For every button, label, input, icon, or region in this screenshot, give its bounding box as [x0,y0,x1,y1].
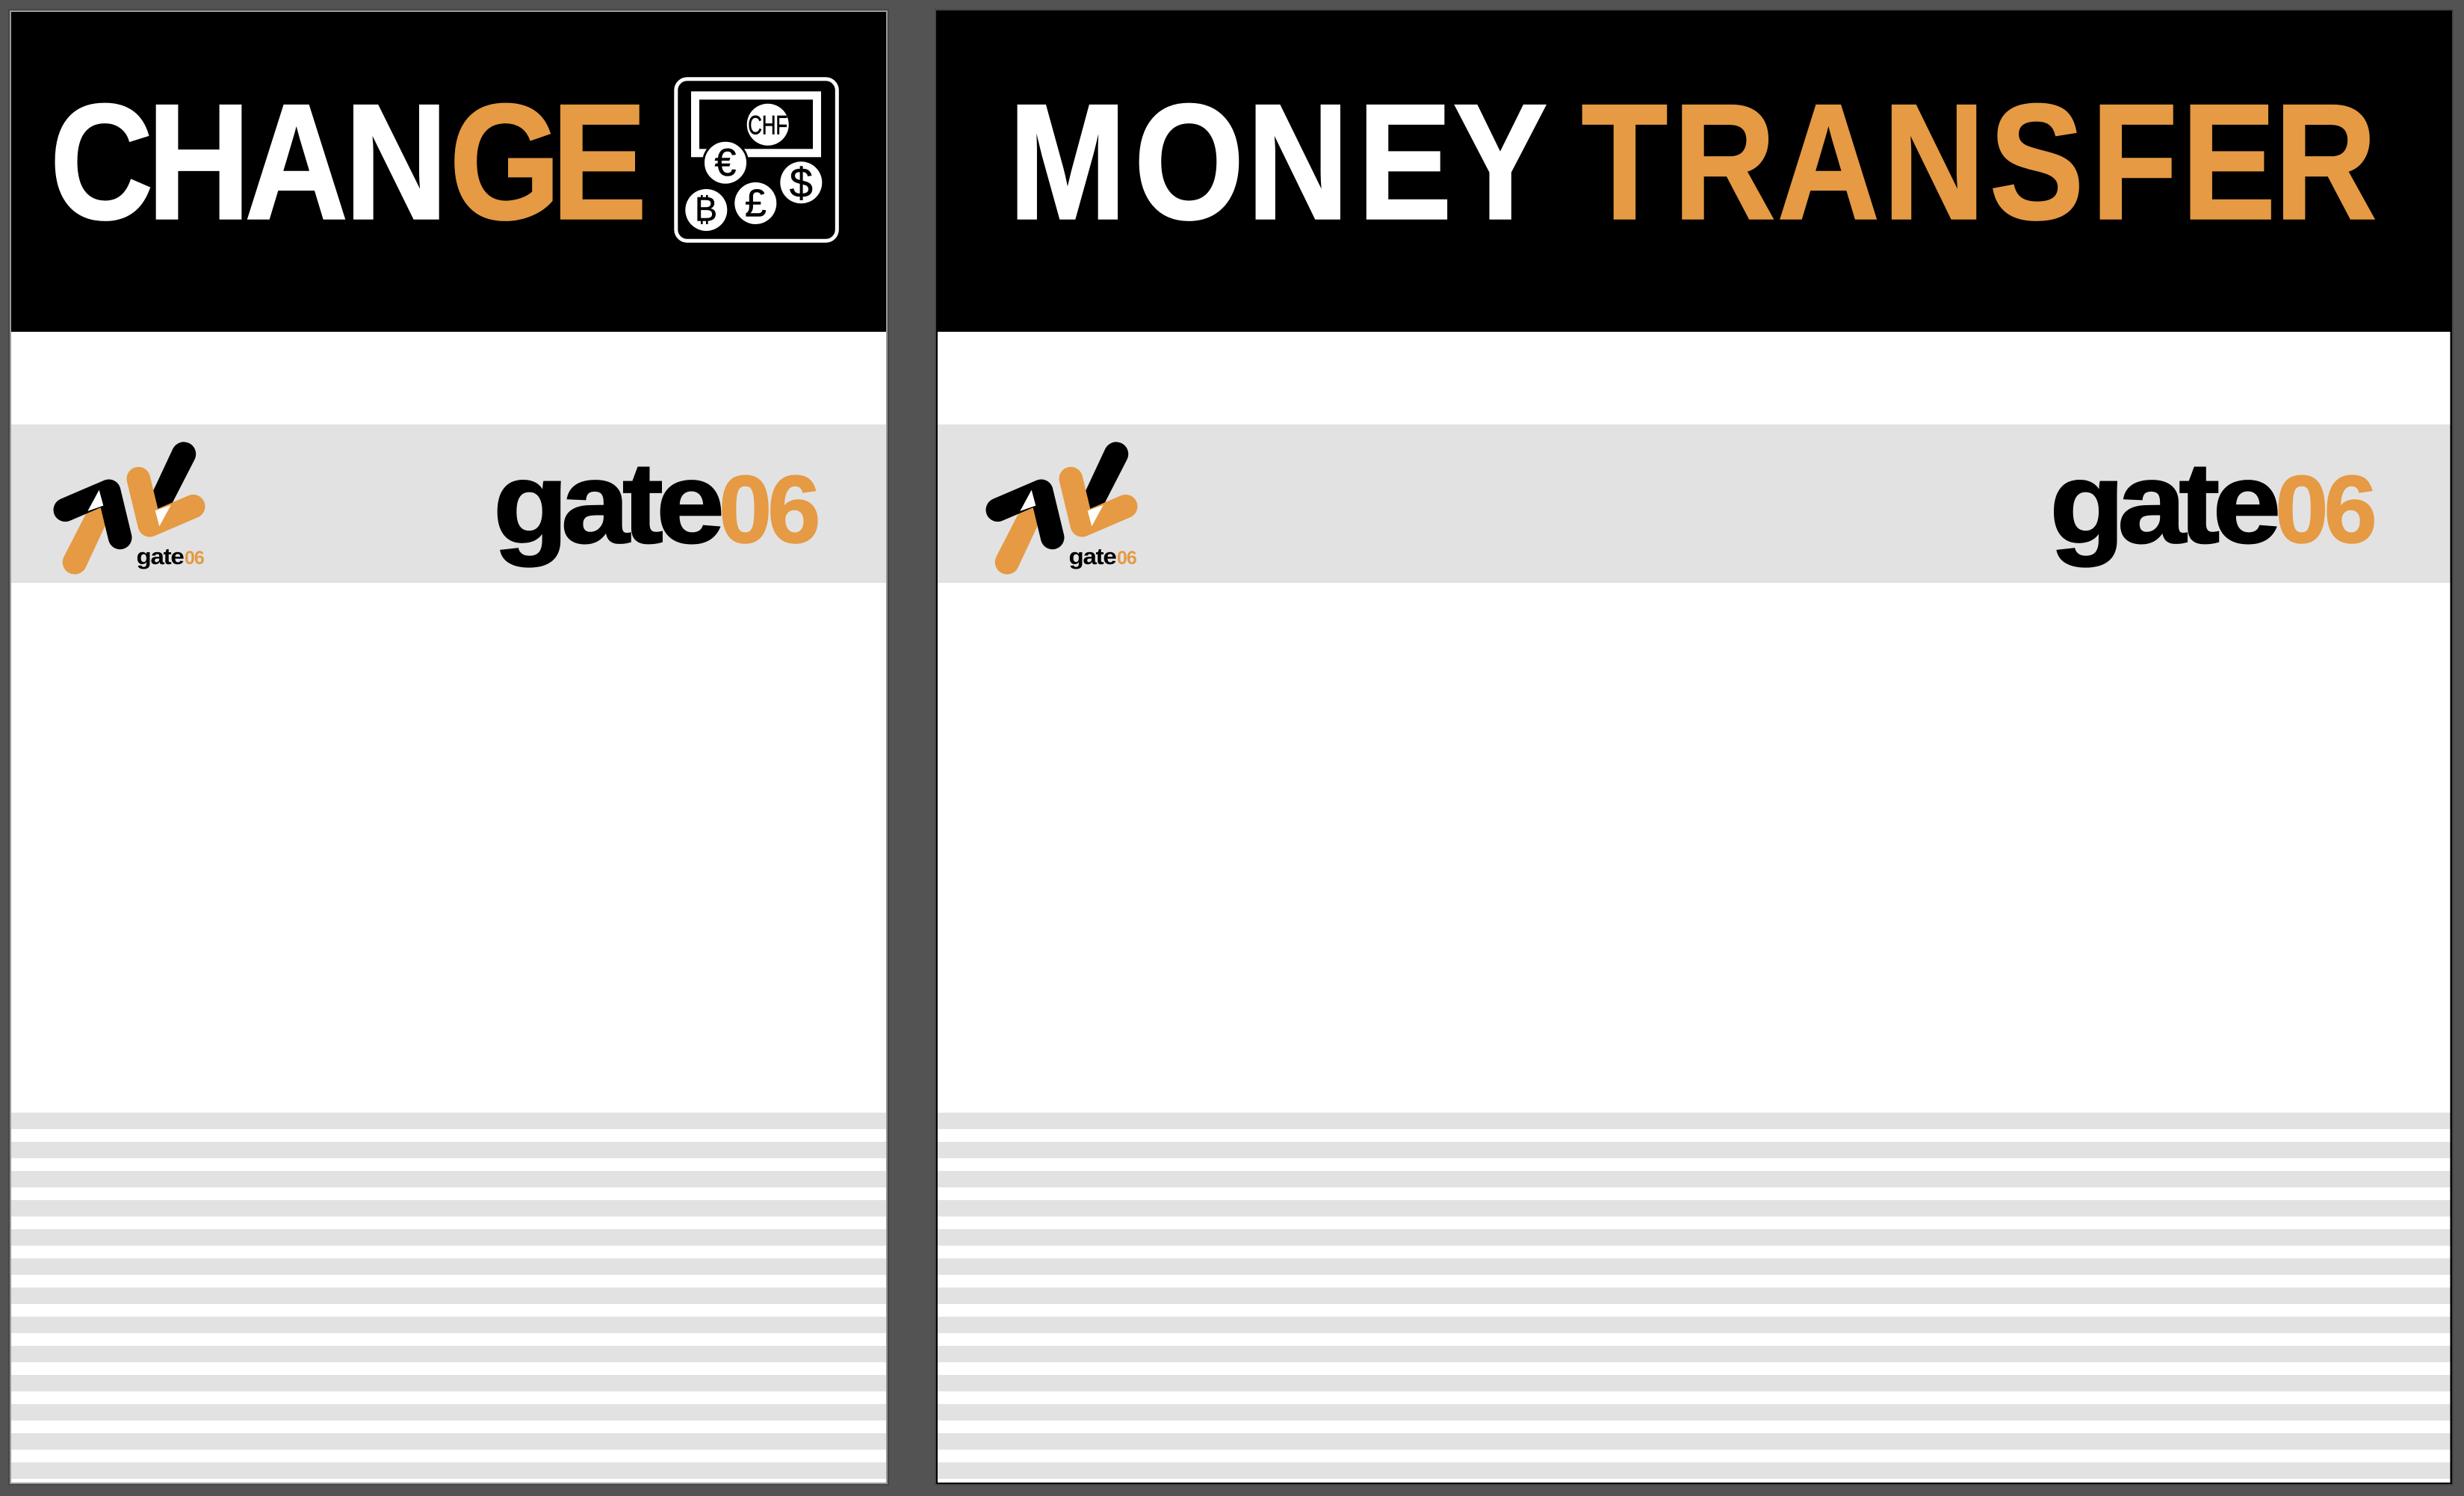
logo mark: change [63,442,196,575]
icon: currency exchange: B [695,191,717,229]
icon: currency exchange: € [715,141,737,185]
heading: MONEY TRANSFER: MONEY [1009,70,1582,254]
large wordmark: change: 06 [719,457,817,563]
small wordmark: change: 06 [185,548,204,569]
logo mark: money transfer [995,442,1128,575]
large wordmark: change [493,439,817,567]
icon: currency exchange [676,79,837,241]
icon: currency exchange: £ [745,182,767,225]
header bar: change [11,12,886,332]
large wordmark: money transfer: gate [2049,439,2277,567]
stripes: money transfer [938,1113,2451,1479]
large wordmark: money transfer [2049,439,2374,567]
large wordmark: change: gate [493,439,721,567]
logo band: change [11,424,886,583]
small wordmark: change [136,543,204,569]
panel: money transfer sign [935,9,2454,1486]
heading: CHANGE: GE [450,69,647,253]
large wordmark: money transfer: 06 [2275,457,2374,563]
small wordmark: money transfer: gate [1068,543,1116,569]
heading: MONEY TRANSFER: TRANSFER [1582,70,2377,254]
heading: CHANGE: CHAN [50,69,448,253]
small wordmark: change: gate [136,543,184,569]
small wordmark: money transfer: 06 [1117,548,1136,569]
stripes: change [11,1113,886,1479]
logo band: money transfer [938,424,2451,583]
icon: currency exchange: $ [790,159,813,206]
small wordmark: money transfer [1068,543,1136,569]
panel: change sign [8,9,889,1486]
header bar: money transfer [938,12,2451,332]
icon: currency exchange: CHF [748,111,787,140]
